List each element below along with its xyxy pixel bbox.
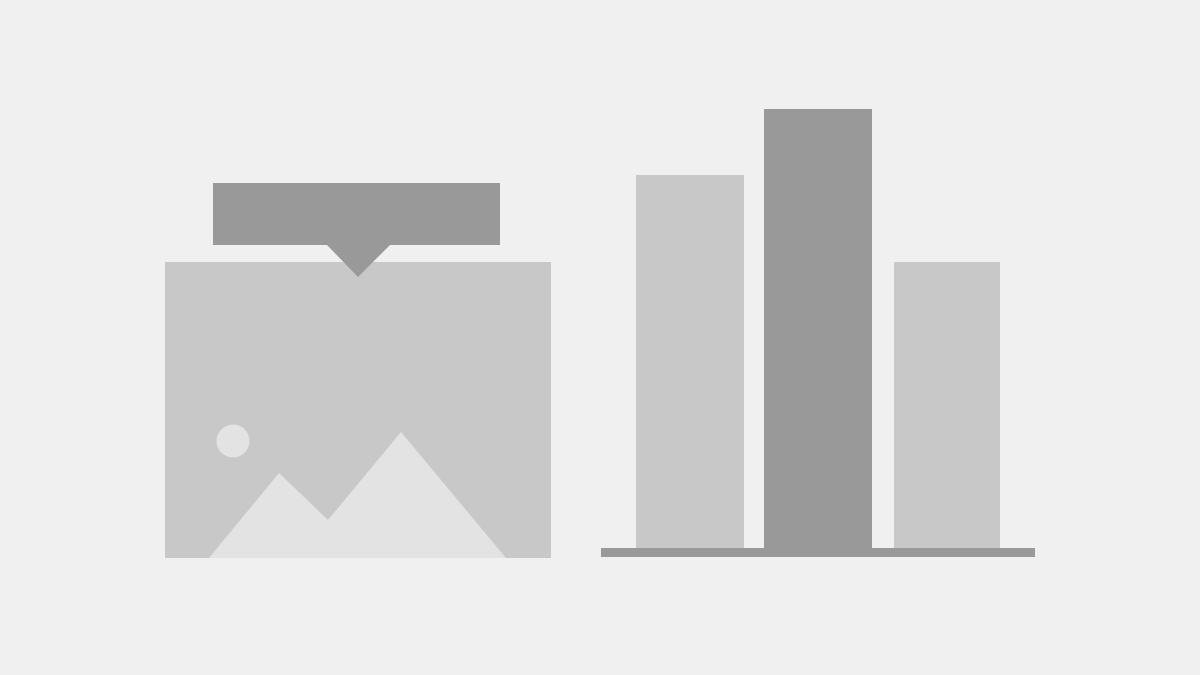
panel: image placeholder with callout	[165, 183, 551, 558]
icon: sun	[216, 424, 250, 458]
icon: mountains	[209, 432, 506, 558]
baseline	[601, 548, 1035, 557]
callout	[213, 183, 500, 277]
bar chart	[601, 109, 1035, 557]
bar 3	[894, 262, 1000, 550]
bar 2	[764, 109, 872, 554]
bar 1	[636, 175, 744, 550]
image frame	[165, 262, 551, 558]
